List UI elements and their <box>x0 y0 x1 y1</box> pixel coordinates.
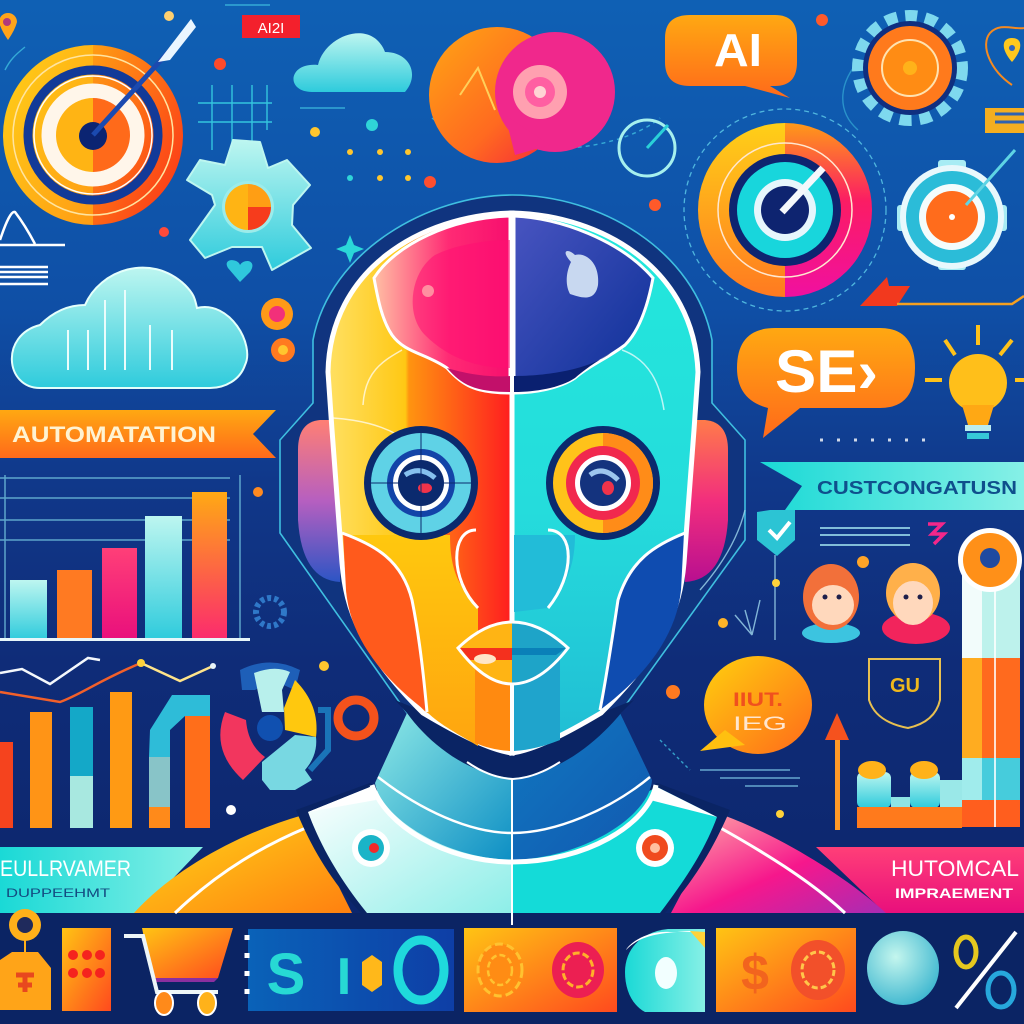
chin shadow <box>395 700 634 779</box>
shield badge <box>869 659 940 728</box>
line chart <box>0 658 216 702</box>
banner: left bottom: EULLRVAMER <box>0 856 131 881</box>
gauge icon right <box>897 150 1015 270</box>
panel: SIO <box>247 929 454 1011</box>
torso <box>296 783 730 913</box>
bar chart <box>0 475 250 641</box>
SEO speech bubble: SE› <box>775 338 878 405</box>
shoulders <box>134 815 886 913</box>
icon: dice card <box>62 928 111 1011</box>
banner: left bottom <box>0 847 203 913</box>
arrow red <box>860 277 1024 306</box>
AI tag <box>242 15 300 38</box>
overlapping orange and pink bubbles <box>429 27 615 163</box>
icon: percent <box>956 932 1016 1008</box>
robot figure <box>134 213 886 925</box>
gear icon light blue <box>187 140 311 282</box>
small gauge outline <box>619 120 675 176</box>
icon: small cloud <box>293 33 412 92</box>
face left half <box>328 213 512 753</box>
panel: dollar pattern <box>716 928 856 1012</box>
speech bubble: hut ieg <box>700 656 812 754</box>
brain right <box>514 216 653 393</box>
banner: left bottom: DUPPEEHMT <box>6 886 111 900</box>
icon: small gear <box>256 598 284 626</box>
banner: automatation: AUTOMATATION <box>12 422 216 447</box>
decorative circuit lines <box>5 5 925 786</box>
center line <box>510 213 514 753</box>
avatar right <box>882 563 950 644</box>
speech bubble: hut ieg: IEG <box>733 714 787 735</box>
icon: location pin right <box>986 27 1024 85</box>
large cloud with chart <box>12 268 247 388</box>
icon: check shield <box>757 510 795 587</box>
speech bubble: hut ieg: IIUT. <box>733 690 783 711</box>
icon: light bulb <box>925 325 1024 439</box>
icon: location pin top-left <box>0 13 17 40</box>
SEO speech bubble <box>737 328 915 438</box>
avatar left <box>802 564 860 643</box>
right eye <box>546 426 660 540</box>
decorative glyph <box>928 524 944 544</box>
banner: custcongatusn: CUSTCONGATUSN <box>817 478 1017 498</box>
icon: shopping cart <box>124 928 233 1015</box>
AI speech bubble <box>665 15 797 98</box>
lower bar chart <box>0 692 210 828</box>
left ear <box>298 420 340 582</box>
icon: triangle line chart <box>0 212 65 284</box>
icon: price tag <box>0 909 51 1010</box>
gauge icon large <box>684 109 886 311</box>
mini bars <box>857 761 962 828</box>
head halo <box>280 195 745 713</box>
mouth <box>458 622 568 684</box>
banner: right bottom: HUTOMCAL <box>891 856 1019 881</box>
ring icon <box>338 700 374 736</box>
banner: automatation <box>0 410 276 458</box>
icon: glass sphere <box>867 931 939 1005</box>
brain left <box>374 216 510 393</box>
face right half <box>512 213 698 753</box>
AI speech bubble: AI <box>714 24 762 76</box>
shield badge: GU <box>890 675 920 697</box>
left eye <box>364 426 478 540</box>
arrow up <box>825 713 849 830</box>
pie gear icon <box>220 662 328 790</box>
banner: custcongatusn <box>760 462 1024 510</box>
panel: swirl patterns <box>464 928 617 1012</box>
neck <box>372 713 656 925</box>
banner: right bottom: IMPRAEMENT <box>895 885 1014 901</box>
right ear <box>685 420 728 582</box>
target icon top-left <box>3 19 196 225</box>
decorative dots <box>159 11 869 818</box>
AI tag: AI2I <box>258 20 284 37</box>
icon: disc <box>625 929 705 1012</box>
panel: SIO: I <box>337 948 351 1006</box>
panel: dollar pattern: $ <box>741 945 769 1001</box>
gear icon top-right <box>858 16 962 120</box>
banner: right bottom <box>816 847 1024 913</box>
tall bar right with circle top <box>958 528 1022 827</box>
panel: SIO: S <box>267 942 305 1007</box>
tag top-right <box>985 108 1024 133</box>
lower face panels <box>333 350 685 751</box>
